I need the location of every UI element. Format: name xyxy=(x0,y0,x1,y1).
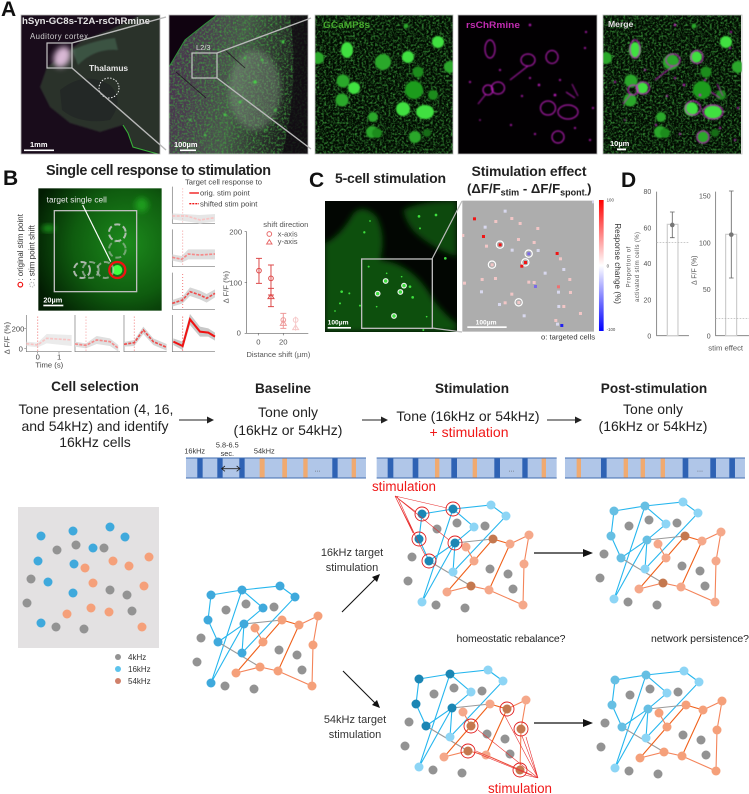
shift legend markers xyxy=(267,232,272,244)
trace plot top 1 xyxy=(172,187,215,223)
panel C title: 5-cell stimulation xyxy=(335,170,446,186)
panel A: GCaMP8s image xyxy=(312,15,456,154)
panel C: 5-cell image xyxy=(325,201,457,332)
trace plot top 4 orig xyxy=(172,314,215,352)
panel C: zoom lines xyxy=(432,201,462,332)
panel B: trace legend: Target cell response to xyxy=(185,177,262,186)
trace plot bottom 2 xyxy=(75,315,120,352)
panel C: stimulation effect map xyxy=(462,197,622,341)
trace plot bottom 3 xyxy=(124,315,167,352)
scale bar 10um: 10µm xyxy=(610,139,630,148)
shifted stim point markers xyxy=(74,224,126,278)
panel B: target cell image xyxy=(38,188,162,311)
label: 54kHz target stimulation xyxy=(324,714,386,741)
text: baseline description xyxy=(234,404,342,438)
tone timeline: baseline: 5.8-6.5 xyxy=(216,440,239,449)
scale bar 100um xyxy=(467,319,507,328)
text: post-stimulation description: Tone only xyxy=(623,401,683,417)
panel B: legend for stim points xyxy=(16,213,37,287)
network: 16kHz stimulation xyxy=(404,500,534,612)
panel D: delta F/F bar chart: Δ F/F (%) xyxy=(692,255,699,285)
panel B: trace legend: shifted stim point xyxy=(200,200,258,209)
panel B: distance shift scatter chart: 200 xyxy=(229,227,242,236)
tone timeline: post-stimulation xyxy=(565,458,745,478)
panel D: proportion bar chart: activated stim cells (%) xyxy=(635,232,641,302)
merge label: Merge xyxy=(608,19,634,29)
panel A: whole-brain section image xyxy=(21,15,160,154)
panel letter D: D xyxy=(621,169,636,192)
colorbar: 100 xyxy=(607,197,614,202)
heading: post-stimulation: Post-stimulation xyxy=(601,381,707,396)
scale bar 20um: 20µm xyxy=(43,295,63,304)
GCaMP8s label: GCaMP8s xyxy=(323,20,370,31)
text: post-stimulation description: (16kHz or 54kHz) xyxy=(599,418,707,434)
stimulation effect title: ) xyxy=(587,181,592,196)
stimulation callout: 16kHz xyxy=(372,479,449,555)
panel B: distance shift scatter chart: 100 xyxy=(229,278,242,287)
tone timeline: baseline: sec. xyxy=(221,449,234,458)
text: baseline description: Tone only xyxy=(258,404,318,420)
panel B: trace axis labels: 0 xyxy=(19,345,23,354)
colorbar xyxy=(599,197,622,332)
panel B: distance shift scatter chart: 0 xyxy=(256,338,261,347)
panel D: delta F/F bar chart xyxy=(692,191,749,353)
trace plot top 2 xyxy=(172,229,215,267)
panel D: delta F/F bar chart: 50 xyxy=(703,287,711,294)
arrow: selection to baseline xyxy=(179,416,214,424)
L2/3 zoom box xyxy=(192,53,217,78)
text: cell selection description xyxy=(19,401,173,450)
panel B: distance shift scatter chart: 0 xyxy=(237,329,241,338)
network: baseline xyxy=(192,582,322,694)
panel B: distance shift scatter chart: 20 xyxy=(279,338,288,347)
targeted ring markers xyxy=(488,241,532,306)
panel D: proportion bar chart: 60 xyxy=(644,225,651,232)
panel B: trace legend: orig. stim point xyxy=(200,189,251,198)
tone timeline: baseline: 54kHz xyxy=(254,447,275,456)
tone timeline: post-stimulation: ... xyxy=(697,464,703,473)
arrow: to 16kHz target stimulation xyxy=(342,574,380,612)
legend: tone frequency: 54kHz xyxy=(128,677,151,686)
label: 54kHz target stimulation: stimulation xyxy=(329,729,381,741)
panel D: proportion bar chart: 0 xyxy=(647,333,651,340)
panel B: trace axis labels: Time (s) xyxy=(35,361,64,370)
panel D: proportion bar chart: 20 xyxy=(644,297,651,304)
target label: target single cell xyxy=(47,194,107,204)
heading: stimulation: Stimulation xyxy=(435,381,509,396)
label: 16kHz target stimulation xyxy=(321,547,383,574)
panel B: trace axis labels: 200 xyxy=(12,325,24,334)
panel D: delta F/F bar chart: 0 xyxy=(707,333,711,340)
panel letter C: C xyxy=(309,169,324,192)
cell response squares xyxy=(462,200,594,327)
arrow: bottom network to post xyxy=(534,719,593,727)
colorbar: -100 xyxy=(607,327,616,332)
auditory cortex label: Auditory cortex xyxy=(30,32,88,41)
legend: tone frequency xyxy=(115,653,151,686)
auditory cortex zoom box xyxy=(47,43,72,68)
panel B: distance shift scatter chart: x-axis xyxy=(278,229,298,238)
panel B: distance shift scatter chart: shift direction xyxy=(263,220,308,229)
arrow: stimulation to post xyxy=(547,416,582,424)
colorbar: Response change (%) xyxy=(613,223,622,304)
panel A: merge image xyxy=(600,15,744,154)
colorbar: 0 xyxy=(607,263,610,268)
question: homeostatic rebalance: homeostatic rebalance? xyxy=(456,633,566,645)
text: baseline description: (16kHz or 54kHz) xyxy=(234,422,342,438)
panel B: trace axis labels: 1 xyxy=(57,352,61,361)
label: 16kHz target stimulation: 16kHz target xyxy=(321,547,383,559)
panel B: legend for stim points: : stim point shift xyxy=(28,224,37,281)
zoom lines between panels A xyxy=(72,17,311,150)
scale bar 100um: 100µm xyxy=(328,319,349,326)
panel D: proportion bar chart: 80 xyxy=(644,189,651,196)
text: stimulation description xyxy=(396,408,540,440)
panel D: delta F/F bar chart: 100 xyxy=(699,240,711,247)
stimulation effect title: stim xyxy=(501,188,519,198)
arrow: baseline to stimulation xyxy=(362,416,388,424)
data points xyxy=(256,258,299,331)
panel B title: Single cell response to stimulation xyxy=(46,163,271,179)
stimulation callout: 54kHz xyxy=(474,716,552,794)
stimulation effect title: spont. xyxy=(560,188,587,198)
tone timeline: stimulation: ... xyxy=(509,464,515,473)
panel B: trace axis labels xyxy=(2,322,64,370)
original stim point marker xyxy=(109,262,125,278)
stimulation effect title: Stimulation effect xyxy=(472,163,587,179)
targeted cells note: o: targeted cells xyxy=(541,332,595,341)
network: 54kHz stimulation xyxy=(400,666,530,778)
stimulation effect title: - ΔF/F xyxy=(519,181,560,196)
pointer line xyxy=(83,205,111,262)
tone timeline: stimulation xyxy=(377,458,557,478)
thalamus label: Thalamus xyxy=(89,63,128,73)
panel D: delta F/F bar chart: stim effect xyxy=(708,344,744,353)
panel B: distance shift scatter chart: y-axis xyxy=(278,237,298,246)
panel D: proportion bar chart xyxy=(627,189,689,340)
image title: hSyn-GC8s-T2A-rsChRmine xyxy=(22,16,150,27)
question: network persistence: network persistence? xyxy=(651,633,749,645)
panel B: distance shift scatter chart: Distance shift (µm) xyxy=(246,350,311,359)
panel B: distance shift scatter chart xyxy=(221,220,311,359)
panel B: trace axis labels: Δ F/F (%) xyxy=(2,322,11,354)
arrow: top network to post xyxy=(534,549,593,557)
stimulation callout: 16kHz: stimulation xyxy=(372,479,436,494)
legend: tone frequency: 4kHz xyxy=(128,653,146,662)
panel B: trace axis labels: 0 xyxy=(36,352,40,361)
panel A: L2/3 cortex image xyxy=(169,15,308,154)
stimulation effect title xyxy=(467,163,592,198)
targeted cell rings xyxy=(375,279,406,318)
panel B: response traces xyxy=(26,187,215,352)
text: stimulation description: + stimulation xyxy=(430,424,508,440)
panel A: rsChRmine image xyxy=(458,15,597,154)
arrow: to 54kHz target stimulation xyxy=(343,671,380,708)
stimulation effect title: (ΔF/F xyxy=(467,181,501,196)
network: 16kHz post-stimulation xyxy=(596,498,726,610)
L2/3 label: L2/3 xyxy=(196,43,211,52)
legend: tone frequency: 16kHz xyxy=(128,665,151,674)
rsChRmine label: rsChRmine xyxy=(466,20,520,31)
scale bar 1mm: 1mm xyxy=(30,140,48,149)
network: 54kHz post-stimulation xyxy=(596,666,726,778)
label: 16kHz target stimulation: stimulation xyxy=(326,562,378,574)
panel: cell scatter by tuning xyxy=(18,507,159,648)
tone timeline: baseline: ... xyxy=(315,464,321,473)
heading: cell selection: Cell selection xyxy=(51,379,139,394)
trace plot top 3 xyxy=(172,273,215,309)
zoom box xyxy=(362,259,432,328)
text: cell selection description: 16kHz cells xyxy=(59,434,131,450)
scale bar 100um: 100µm xyxy=(476,319,497,326)
label: 54kHz target stimulation: 54kHz target xyxy=(324,714,386,726)
panel letter B: B xyxy=(3,167,18,190)
panel B: legend for stim points: : original stim point xyxy=(16,213,25,281)
inner box xyxy=(54,211,137,292)
thalamus dotted circle xyxy=(99,78,119,98)
panel B: distance shift scatter chart: Δ F/F (%) xyxy=(221,271,230,303)
text: cell selection description: and 54kHz) and identify xyxy=(21,418,169,434)
text: cell selection description: Tone presentation (4, 16, xyxy=(19,401,173,417)
text: post-stimulation description xyxy=(599,401,707,434)
panel D: proportion bar chart: Proportion of xyxy=(627,246,633,287)
panel D: delta F/F bar chart: 150 xyxy=(699,194,711,201)
trace plot bottom 1 xyxy=(26,315,72,352)
tone timeline: baseline xyxy=(184,440,366,478)
panel B: trace legend xyxy=(185,177,262,209)
scale bar 100um: 100µm xyxy=(174,140,198,149)
text: stimulation description: Tone (16kHz or 54kHz) xyxy=(396,408,540,424)
heading: baseline: Baseline xyxy=(255,381,311,396)
panel D: proportion bar chart: 40 xyxy=(644,261,651,268)
tone timeline: baseline: 16kHz xyxy=(184,447,205,456)
